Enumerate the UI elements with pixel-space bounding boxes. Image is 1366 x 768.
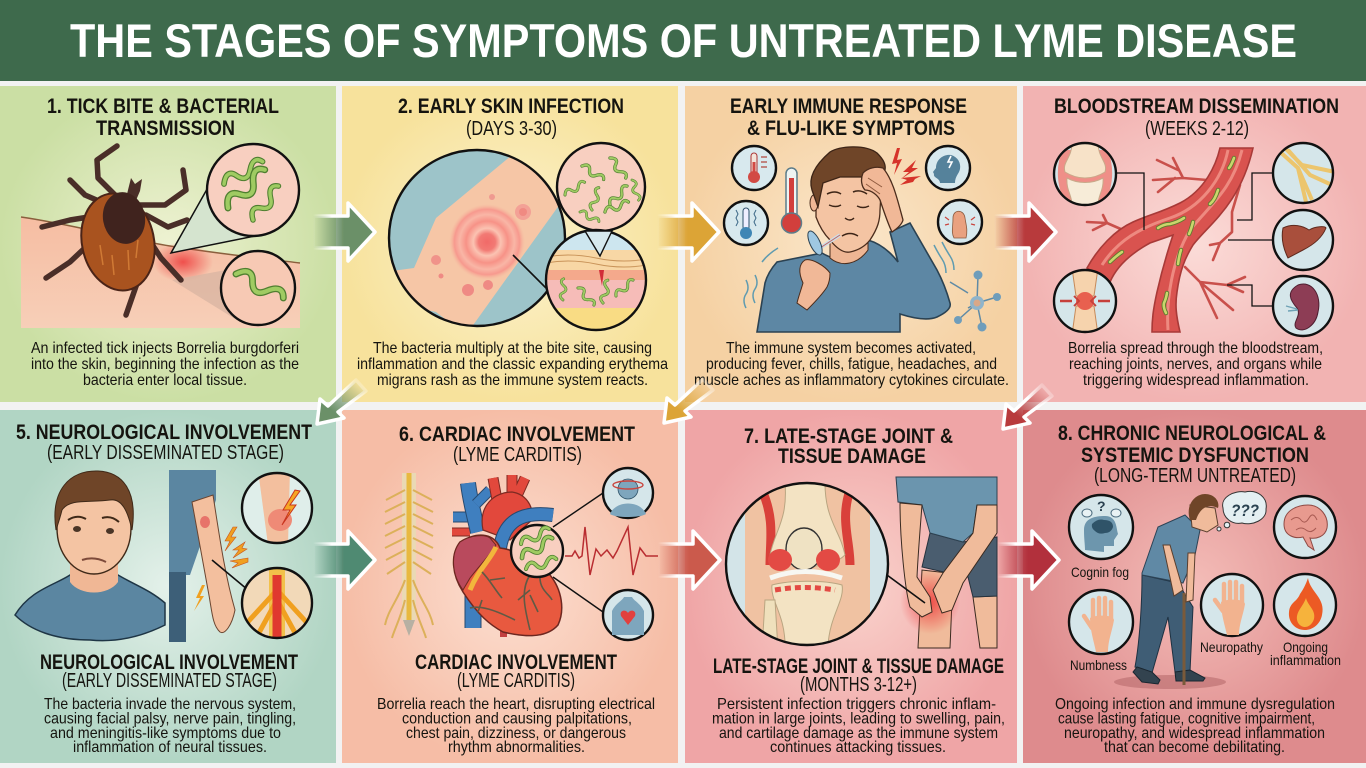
connector lines	[553, 493, 603, 612]
icon: brain	[1274, 496, 1336, 558]
connector line	[887, 575, 925, 603]
heading 6	[399, 423, 635, 466]
arrow: row 1 down to stage 7	[1003, 385, 1052, 429]
label: ongoing inflammation: Ongoing	[1283, 639, 1328, 655]
arrow: stage 2 to 3	[657, 203, 719, 261]
body text 8: that can become debilitating.	[1104, 739, 1285, 756]
stooped man with cane	[1114, 494, 1226, 689]
label: ongoing inflammation: inflammation	[1270, 652, 1341, 668]
body text 8: neuropathy, and widespread inflammation	[1064, 725, 1325, 742]
body text 6: rhythm abnormalities.	[448, 739, 585, 756]
heading 8: SYSTEMIC DYSFUNCTION	[1081, 444, 1309, 467]
heading 4: (WEEKS 2-12)	[1145, 118, 1249, 140]
icon: neuropathy hand	[1201, 574, 1263, 636]
magnifier: bacteria small	[221, 251, 295, 325]
thought bubble	[1217, 491, 1266, 531]
heading 3: & FLU-LIKE SYMPTOMS	[747, 117, 955, 140]
sub-heading 5: NEUROLOGICAL INVOLVEMENT	[40, 651, 298, 674]
body text 3	[694, 340, 1009, 389]
heading 8	[1058, 422, 1326, 487]
body text 1: into the skin, beginning the infection as the	[31, 356, 299, 373]
body text 7: Persistent infection triggers chronic inflam-	[717, 696, 996, 713]
body text 6	[377, 696, 655, 756]
body text 2: inflammation and the classic expanding erythema	[357, 356, 668, 373]
icon: ECG line	[565, 527, 658, 575]
heading 7	[744, 425, 953, 468]
body text 7: and cartilage damage as the immune system	[719, 725, 998, 742]
icon: heart	[452, 475, 562, 636]
heading 4	[1054, 95, 1339, 140]
label: cognitive fog: Cognin fog	[1071, 564, 1129, 580]
panel 2: skin infection	[342, 86, 678, 402]
shiver marks	[744, 242, 954, 308]
body text 2: migrans rash as the immune system reacts.	[377, 372, 648, 389]
label: neuropathy: Neuropathy	[1200, 639, 1263, 655]
thought bubble: ???	[1231, 501, 1260, 520]
sub-heading 6: CARDIAC INVOLVEMENT	[415, 651, 617, 674]
sick man	[757, 147, 950, 332]
blood vessels	[1087, 148, 1253, 332]
sub-heading 5: (EARLY DISSEMINATED STAGE)	[62, 670, 277, 692]
skin illustration	[21, 152, 300, 328]
portrait with facial palsy	[15, 471, 165, 641]
panel 7: joint damage	[685, 410, 1017, 763]
icon: tick	[42, 146, 187, 315]
body text 7	[712, 696, 1005, 756]
icon: liver	[1273, 210, 1333, 270]
body text 6: Borrelia reach the heart, disrupting electrical	[377, 696, 655, 713]
icon: flame	[1274, 574, 1336, 636]
heading 7: 7. LATE-STAGE JOINT &	[744, 425, 953, 448]
heading 2	[398, 95, 624, 140]
sub-heading 6: (LYME CARDITIS)	[457, 670, 575, 692]
body text 6: conduction and causing palpitations,	[402, 710, 632, 728]
heading 6: (LYME CARDITIS)	[453, 444, 582, 466]
icon: spine	[385, 473, 433, 638]
body text 3: producing fever, chills, fatigue, headaches, and	[706, 356, 997, 373]
heading 8: (LONG-TERM UNTREATED)	[1094, 465, 1296, 487]
magnifier: nerve pain arm	[242, 470, 312, 545]
heading 1: TRANSMISSION	[96, 117, 235, 140]
body text 1: An infected tick injects Borrelia burgdorferi	[31, 340, 299, 357]
body text 7: mation in large joints, leading to swelling, pain,	[712, 710, 1005, 728]
icon: nerves	[1273, 143, 1335, 203]
icon: joint	[1054, 143, 1116, 205]
heading 1	[47, 95, 279, 140]
icon: dizziness	[603, 468, 653, 518]
panel 4: bloodstream	[1023, 86, 1366, 402]
sub-heading 7: LATE-STAGE JOINT & TISSUE DAMAGE	[713, 655, 1004, 678]
heading 2: (DAYS 3-30)	[466, 118, 557, 140]
panel 5: neurological	[0, 410, 336, 763]
icon: kidney	[1273, 276, 1333, 336]
body text 3: The immune system becomes activated,	[726, 340, 976, 357]
panel 6: cardiac	[342, 410, 678, 763]
arrow: stage 3 to 4	[994, 203, 1056, 261]
icon: cognitive fog	[1069, 495, 1133, 559]
icon: inflamed joint	[1054, 268, 1116, 335]
sub-heading 7	[713, 655, 1004, 696]
magnifier: skin layers	[540, 230, 652, 332]
body text 5: causing facial palsy, nerve pain, tingling,	[44, 710, 296, 728]
icon: cognitive fog: ?	[1097, 498, 1106, 514]
icon: cytokine molecule	[950, 270, 1001, 332]
arm with pain marks	[169, 470, 248, 642]
label: numbness: Numbness	[1070, 657, 1127, 673]
heading 3	[730, 95, 967, 140]
body text 1: bacteria enter local tissue.	[83, 372, 247, 389]
standing leg figure	[896, 477, 997, 648]
magnifier: spine inflammation	[242, 565, 312, 640]
header banner	[0, 0, 1366, 81]
heading 6: 6. CARDIAC INVOLVEMENT	[399, 423, 635, 446]
body text 4	[1068, 340, 1323, 389]
connector line	[212, 560, 248, 590]
arrow: stage 1 to 2	[313, 203, 375, 261]
sub-heading 5	[40, 651, 298, 692]
icon: numb hand	[1069, 590, 1133, 654]
arrow: row 1 down to stage 6	[664, 379, 713, 423]
arrow: stage 7 to 8	[997, 531, 1059, 589]
body text 2: The bacteria multiply at the bite site, causing	[373, 340, 652, 357]
sub-heading 7: (MONTHS 3-12+)	[800, 674, 917, 696]
icons: symptom circles	[724, 146, 982, 245]
heading 7: TISSUE DAMAGE	[778, 445, 926, 468]
body text 1	[31, 340, 299, 389]
body text 3: muscle aches as inflammatory cytokines circulate.	[694, 372, 1009, 389]
icon: thermometer	[782, 168, 802, 233]
magnifier: bacteria in heart	[511, 525, 563, 577]
body text 7: continues attacking tissues.	[770, 739, 946, 756]
body text 4: triggering widespread inflammation.	[1083, 372, 1309, 389]
body text 5	[44, 696, 296, 756]
connector lines	[1117, 173, 1277, 306]
heading 3: EARLY IMMUNE RESPONSE	[730, 95, 967, 118]
icon: headache lightning	[892, 148, 921, 185]
magnifier: knee joint	[726, 480, 888, 650]
body text 4: reaching joints, nerves, and organs while	[1069, 356, 1322, 373]
panel 8: chronic dysfunction	[1023, 410, 1366, 763]
body text 8	[1055, 696, 1335, 756]
label: ongoing inflammation	[1270, 639, 1341, 668]
body text 8: cause lasting fatigue, cognitive impairment,	[1058, 710, 1315, 728]
heading 2: 2. EARLY SKIN INFECTION	[398, 95, 624, 118]
body text 5: and meningitis-like symptoms due to	[50, 725, 281, 742]
magnifier: multiplying bacteria	[557, 143, 645, 231]
body text 4: Borrelia spread through the bloodstream,	[1068, 340, 1323, 357]
body text 2	[357, 340, 668, 389]
panel 1: tick bite	[0, 86, 336, 402]
arm with rash	[385, 150, 570, 335]
body text 8: Ongoing infection and immune dysregulation	[1055, 696, 1335, 713]
arrow: stage 5 to 6	[313, 531, 375, 589]
body text 5: The bacteria invade the nervous system,	[44, 696, 296, 713]
heading 5	[16, 421, 312, 464]
magnifier: bacteria large	[207, 144, 299, 236]
body text 5: inflammation of neural tissues.	[73, 739, 267, 756]
body text 6: chest pain, dizziness, or dangerous	[406, 725, 626, 742]
sub-heading 6	[415, 651, 617, 692]
arrow: stage 6 to 7	[658, 531, 720, 589]
heading 5: (EARLY DISSEMINATED STAGE)	[47, 442, 284, 464]
heading 5: 5. NEUROLOGICAL INVOLVEMENT	[16, 421, 312, 444]
arrow: row 1 down to stage 5	[317, 380, 366, 424]
heading 1: 1. TICK BITE & BACTERIAL	[47, 95, 279, 118]
icon: chest pain	[603, 590, 653, 640]
panel 3: immune response	[685, 86, 1017, 402]
